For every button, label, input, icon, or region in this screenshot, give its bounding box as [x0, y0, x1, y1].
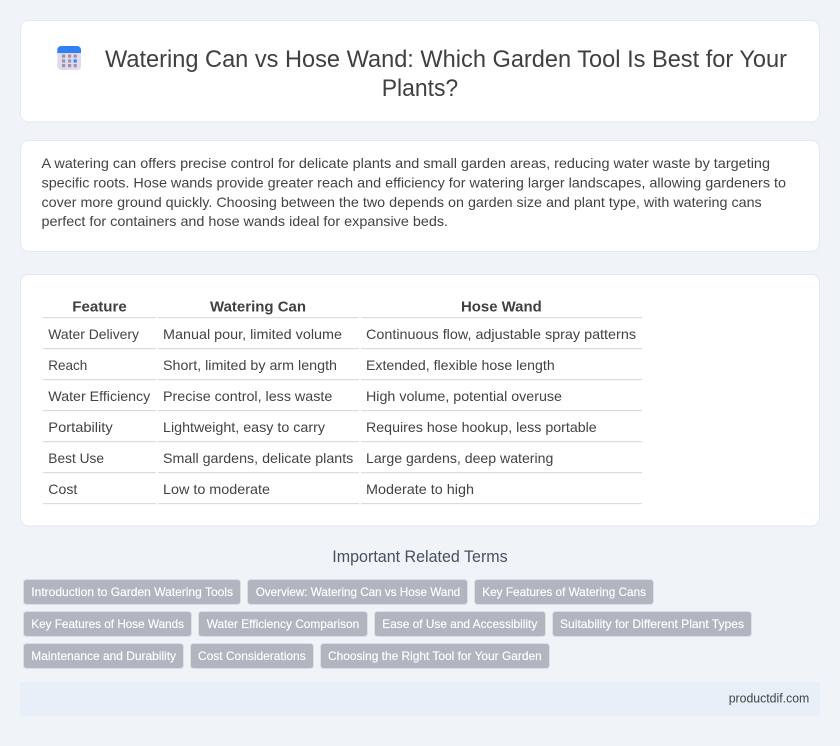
footer bar: [20, 682, 820, 716]
table row: best use: Small gardens, delicate plants: [163, 450, 353, 466]
tag group: related terms: [24, 580, 752, 668]
tag: [320, 644, 550, 668]
text block: intro: cover more ground quickly. Choosing between the two depends on garden size and plant type, with watering cans: [42, 194, 762, 210]
title: Plants?: [382, 75, 458, 102]
table row: water delivery: Water Delivery: [48, 326, 139, 342]
table row: reach: Reach: [48, 357, 87, 373]
table header row: Watering Can: [210, 299, 306, 316]
table row: water efficiency: Precise control, less waste: [163, 388, 333, 404]
table row: water delivery: [43, 326, 642, 349]
panel: comparison table: [20, 274, 820, 526]
text block: intro: perfect for containers and hose wands ideal for expansive beds.: [42, 213, 448, 229]
tag: [24, 580, 240, 604]
heading: important related terms: Important Related Terms: [332, 548, 508, 566]
table row: water efficiency: Water Efficiency: [48, 388, 150, 404]
tag: [474, 580, 654, 604]
table row: best use: [43, 450, 642, 473]
footer source text: productdif.com: [729, 692, 809, 706]
tag: Choosing the Right Tool for Your Garden: [328, 649, 542, 663]
table row: reach: [43, 357, 642, 380]
tag: [248, 580, 468, 604]
tag: Suitability for Different Plant Types: [560, 617, 744, 631]
tag: [190, 644, 314, 668]
table row: reach: Extended, flexible hose length: [366, 357, 555, 373]
table row: best use: Best Use: [48, 450, 104, 466]
table row: water delivery: Manual pour, limited volume: [163, 326, 342, 342]
table row: portability: [43, 419, 642, 442]
table row: portability: Requires hose hookup, less portable: [366, 419, 597, 435]
table header row: Hose Wand: [461, 299, 542, 316]
tag: Cost Considerations: [198, 649, 306, 663]
table row: portability: Portability: [48, 419, 113, 435]
table header row: [43, 299, 642, 318]
tag: Ease of Use and Accessibility: [382, 617, 537, 631]
table row: cost: [43, 481, 642, 504]
table row: water efficiency: High volume, potential overuse: [366, 388, 562, 404]
table header row: Feature: [72, 299, 127, 316]
text block: intro: [42, 155, 786, 229]
tag: [24, 644, 184, 668]
tag: Key Features of Watering Cans: [482, 585, 646, 599]
table row: cost: Low to moderate: [163, 481, 270, 497]
icon: calendar: [57, 46, 81, 70]
panel: title header: [20, 20, 820, 122]
tag: Key Features of Hose Wands: [31, 617, 184, 631]
table row: water efficiency: [43, 388, 642, 411]
tag: [552, 612, 752, 636]
text block: intro: specific roots. Hose wands provide greater reach and efficiency for watering larger landscapes, allowing gardeners to: [42, 174, 786, 190]
tag: [198, 612, 368, 636]
tag: [374, 612, 546, 636]
tag: Water Efficiency Comparison: [207, 617, 359, 631]
table row: water delivery: Continuous flow, adjustable spray patterns: [366, 326, 636, 342]
table row: portability: Lightweight, easy to carry: [163, 419, 325, 435]
panel: intro paragraph: [20, 140, 820, 252]
text block: intro: A watering can offers precise control for delicate plants and small garden areas, reducing water waste by targeting: [42, 155, 770, 171]
title: [105, 46, 787, 102]
tag: Overview: Watering Can vs Hose Wand: [256, 585, 460, 599]
tag: Introduction to Garden Watering Tools: [31, 585, 233, 599]
table row: cost: Moderate to high: [366, 481, 474, 497]
tag: Maintenance and Durability: [31, 649, 176, 663]
table row: best use: Large gardens, deep watering: [366, 450, 553, 466]
table row: cost: Cost: [48, 481, 77, 497]
table row: reach: Short, limited by arm length: [163, 357, 337, 373]
title: Watering Can vs Hose Wand: Which Garden Tool Is Best for Your: [105, 46, 787, 73]
tag: [24, 612, 192, 636]
